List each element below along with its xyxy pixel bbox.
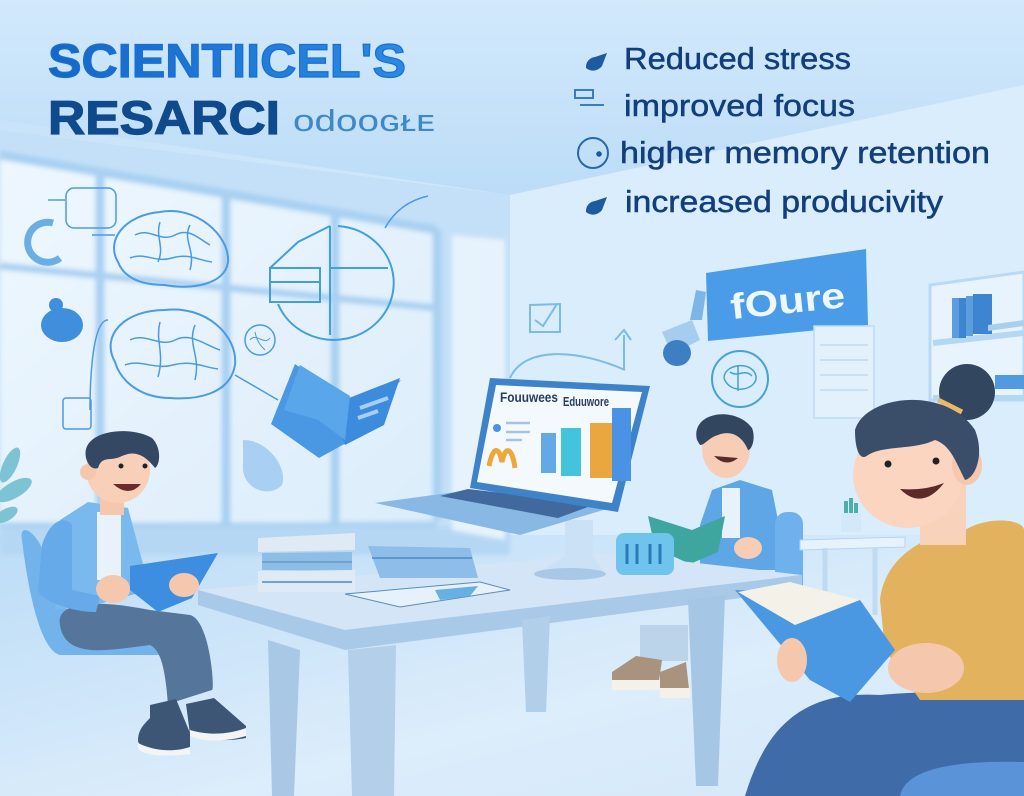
left person xyxy=(22,431,246,756)
laptop xyxy=(375,378,650,535)
title: ᴏdoᴏɢᴌᴇ xyxy=(293,103,435,138)
chair xyxy=(22,530,165,655)
icon: brain upper xyxy=(114,211,228,287)
lightbulb icon xyxy=(662,290,706,366)
icon: ring xyxy=(28,222,60,262)
table xyxy=(198,553,802,796)
icon: half circle blob xyxy=(243,440,283,491)
book stack xyxy=(258,533,478,592)
poster xyxy=(814,326,874,418)
connector lines xyxy=(48,188,428,429)
icon: small brain xyxy=(245,325,275,355)
sign: fOure xyxy=(728,274,847,327)
benefits list xyxy=(575,41,990,219)
title xyxy=(48,34,435,144)
monitor stand xyxy=(534,520,606,580)
icon: circle chart xyxy=(270,226,394,340)
icon: brain lower xyxy=(111,309,235,398)
window xyxy=(0,155,510,555)
right person xyxy=(735,364,1024,796)
arrows above laptop xyxy=(510,304,631,378)
benefit: memory retention: higher memory retention xyxy=(620,135,990,170)
benefit: productivity: increased producivity xyxy=(625,184,944,219)
right side table xyxy=(800,498,905,615)
diagram line icons xyxy=(48,188,428,429)
benefit: improved focus: improved focus xyxy=(624,88,855,123)
title: RESARCI xyxy=(48,91,280,144)
floating book xyxy=(271,364,401,458)
sign xyxy=(706,249,868,341)
paper on table xyxy=(345,582,510,607)
benefit: reduced stress: Reduced stress xyxy=(624,41,851,76)
laptop chart xyxy=(489,389,631,481)
icon: blue blob xyxy=(41,298,83,342)
shelf xyxy=(930,272,1024,400)
device clock xyxy=(616,533,674,575)
title: SCIENTIICEL'S xyxy=(48,34,406,87)
plant xyxy=(0,445,35,527)
laptop chart: Eduuwore xyxy=(563,394,609,409)
brain circle icon xyxy=(712,351,768,407)
laptop chart: Fouuwees xyxy=(500,389,558,405)
back person xyxy=(612,414,803,698)
